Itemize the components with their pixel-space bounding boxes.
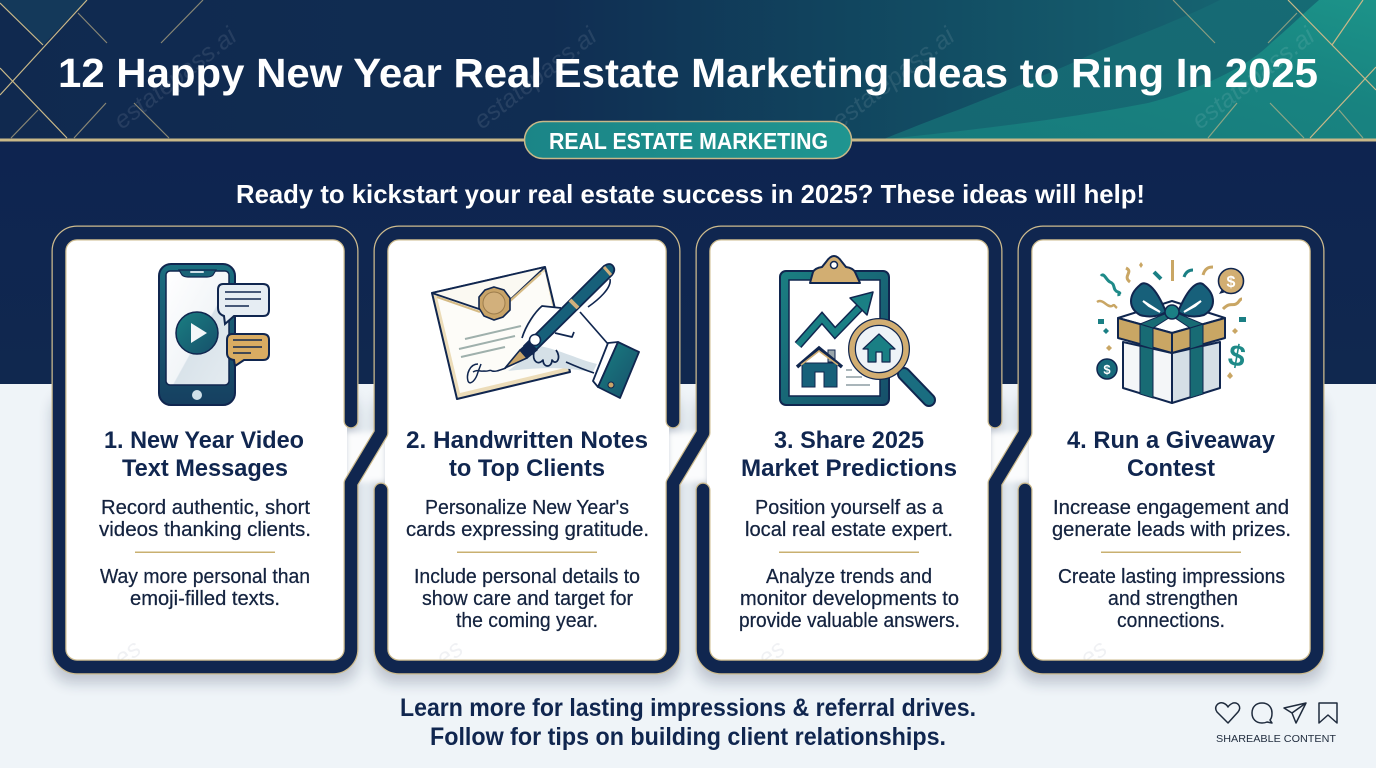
icon: comment [1252,703,1272,723]
text: card 3 description: local real estate expert. [745,519,953,541]
text: card 4 detail: Create lasting impressions [1058,566,1285,588]
icon: gift box with confetti: $ [1103,362,1111,377]
text: card 4 description [1052,497,1291,541]
footer call to action: Follow for tips on building client relationships. [430,723,946,751]
text: card 2 description: cards expressing gratitude. [406,519,649,541]
text: card 4 description: Increase engagement and [1053,497,1289,519]
text: card 3 detail [739,566,960,632]
panel: card 1 [52,226,358,674]
text: card 1 description: videos thanking clients. [99,519,311,541]
text: card 3 detail: monitor developments to [740,588,959,610]
heading: card 3: 3. Share 2025 [774,427,924,454]
heading: card 1: 1. New Year Video [104,427,304,454]
panel: card 2: es [430,634,469,673]
header banner: estatepass.ai [108,21,243,135]
heading: card 2: 2. Handwritten Notes [406,427,648,454]
title: 12 Happy New Year Real Estate Marketing Ideas to Ring In 2025 [58,50,1318,96]
text: card 2 detail: show care and target for [422,588,633,610]
panel: card 3: es [752,634,791,673]
heading: card 4: 4. Run a Giveaway [1067,427,1276,454]
text: card 4 detail: connections. [1117,610,1225,632]
text: card 1 detail: Way more personal than [100,566,310,588]
icon: gift box with confetti: $ [1227,274,1236,291]
icon: envelope and hand with pen [432,264,639,399]
icon: gift box with confetti [1097,260,1248,403]
icon: bookmark [1319,703,1337,723]
connected card frames [59,233,1317,667]
panel: card 2 [374,226,680,674]
header banner: estatepass.ai [468,21,603,135]
gold header divider [0,138,1376,142]
text: card 1 description: Record authentic, short [101,497,310,519]
icon: clipboard with chart and magnifier [780,256,929,405]
heading: card 4 [1067,427,1276,482]
heading: card 3: Market Predictions [741,455,957,482]
connector gaps between cards [346,432,1030,482]
panel: card 4: es [1074,634,1113,673]
heading: card 1 [104,427,304,482]
icon: phone with video and chat bubbles [159,264,269,405]
heading: card 4: Contest [1127,455,1215,482]
subtitle: Ready to kickstart your real estate success in 2025? These ideas will help! [236,179,1145,209]
panel: card 4 [1018,226,1324,674]
header banner: estatepass.ai [826,21,961,135]
heading: card 2 [406,427,648,482]
text: card 2 description: Personalize New Year's [425,497,629,519]
text: card 1 description [99,497,311,541]
footer call to action: Learn more for lasting impressions & referral drives. [400,694,976,722]
text: card 3 description [745,497,953,541]
text: card 4 description: generate leads with prizes. [1052,519,1291,541]
text: card 3 description: Position yourself as a [755,497,944,519]
text: card 2 detail [414,566,640,632]
text: card 1 detail [100,566,310,610]
text: card 3 detail: provide valuable answers. [739,610,960,632]
header banner: estatepass.ai [1186,21,1321,135]
text: card 3 detail: Analyze trends and [766,566,932,588]
card drop shadows [52,393,1324,683]
social share icons [1216,703,1337,723]
header banner [0,0,1376,140]
text: card 4 detail [1058,566,1285,632]
panel: card 3 [696,226,1002,674]
text: card 2 detail: the coming year. [456,610,598,632]
panel: card 1: es [108,634,147,673]
footer call to action [400,694,976,751]
heading: card 1: Text Messages [122,455,288,482]
shareable content label: SHAREABLE CONTENT [1216,733,1337,745]
icon: gift box with confetti: $ [1226,339,1248,374]
heading: card 3 [741,427,957,482]
icon: heart [1216,703,1240,723]
text: card 2 detail: Include personal details to [414,566,640,588]
text: card 2 description [406,497,649,541]
icon: paper plane [1284,703,1306,723]
category pill: REAL ESTATE MARKETING [549,128,828,154]
category pill [524,122,852,158]
text: card 1 detail: emoji-filled texts. [130,588,280,610]
heading: card 2: to Top Clients [449,455,605,482]
text: card 4 detail: and strengthen [1108,588,1238,610]
